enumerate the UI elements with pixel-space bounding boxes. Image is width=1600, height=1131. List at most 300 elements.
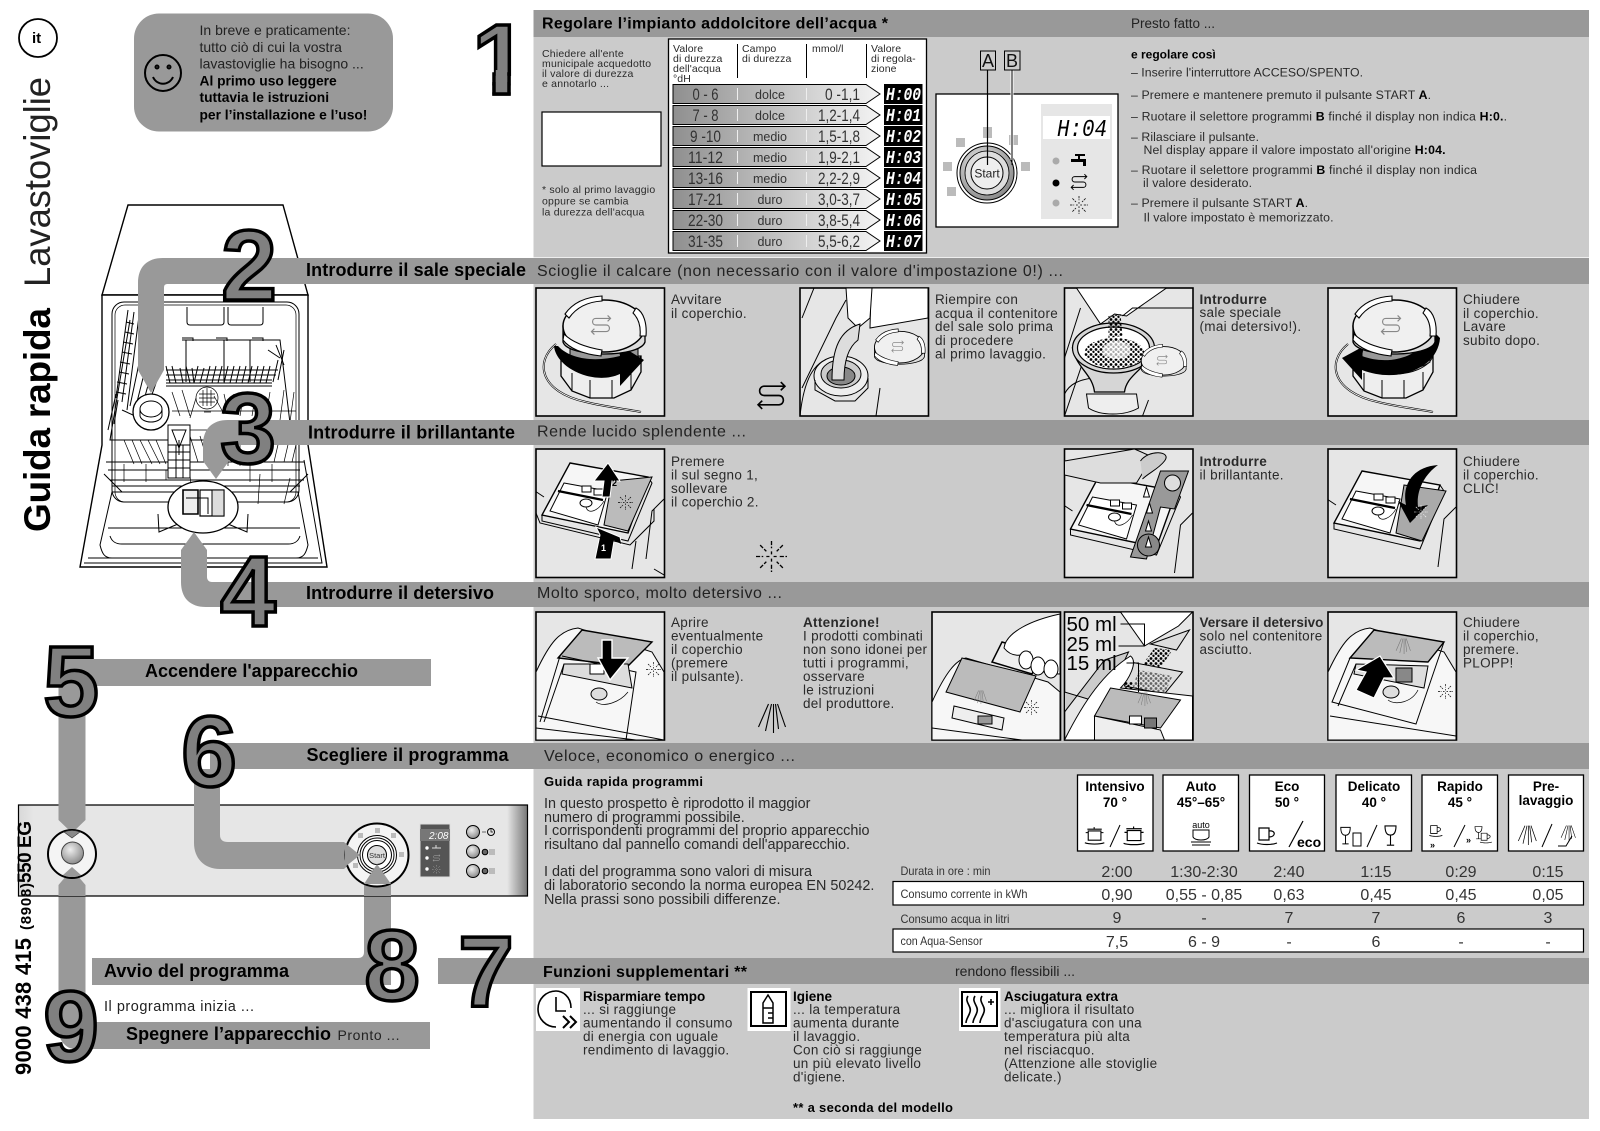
programme card: Eco: Eco (1275, 779, 1299, 794)
text: close and press: premere. (1463, 642, 1519, 657)
text: setting instructions: – Premere il pulsante START A. (1131, 196, 1308, 210)
row: H:04: medio (753, 172, 787, 186)
illustration: open dishwasher (80, 205, 327, 567)
callout: first use bubble: per l’installazione e l’uso! (200, 108, 367, 122)
function: extra drying: nel risciacquo. (1004, 1042, 1095, 1058)
row: energy (893, 882, 1584, 905)
programme card: Rapido: » (1430, 840, 1435, 850)
language badge: it: it (32, 30, 41, 47)
image: open rinse aid lid: 1 (601, 543, 606, 553)
band 9 and connector arrow (58, 869, 430, 1049)
row: aqua-sensor (893, 929, 1584, 952)
header band 2 with connector arrow (138, 258, 1589, 393)
title: Guida rapida Lavastoviglie: Guida rapida (17, 308, 58, 532)
callout: first use bubble: In breve e praticamente: (200, 22, 350, 38)
numeral 4: 4 (220, 536, 276, 648)
text: ask the water board (542, 48, 651, 90)
programme card: Rapido: Rapido (1437, 779, 1483, 794)
band 7 header (438, 958, 1589, 984)
row: water: 7 (1372, 910, 1381, 927)
title: Guida rapida Lavastoviglie (17, 77, 58, 532)
programme card: Pre-lavaggio: lavaggio (1519, 793, 1573, 808)
text: close cap: Lavare (1463, 319, 1506, 334)
row: H:00: dolce (755, 88, 785, 102)
text: pour detergent (1200, 615, 1323, 657)
text: close lid click (1463, 454, 1539, 496)
text: setting instructions: – Inserire l'interruttore ACCESO/SPENTO. (1131, 66, 1363, 80)
note box: blank (542, 112, 661, 166)
text: add rinse aid: Introdurre (1200, 454, 1267, 469)
numeral 5: 5 (43, 626, 99, 738)
text: setting instructions: Nel display appare il valore impostato all'origine H:04. (1144, 143, 1446, 157)
programme card: Auto: auto (1192, 820, 1210, 830)
numeral 9: 9 (43, 971, 99, 1083)
row: H:02: 1,5-1,8 (818, 127, 860, 146)
row: H:00: 0 -1,1 (825, 85, 860, 104)
heading: step 6 (306, 745, 795, 765)
row: H:01: 7 - 8 (692, 106, 718, 125)
image: close cap (1328, 288, 1456, 416)
text: warning about combined products: I prodotti combinati (803, 628, 923, 644)
diagram: control panel with knob and display: Start (974, 166, 1000, 180)
text: open lid: il pulsante). (671, 669, 744, 684)
function: extra drying: delicate.) (1004, 1070, 1062, 1084)
text: setting instructions (1131, 48, 1507, 224)
text: programme starts: Il programma inizia ... (104, 999, 254, 1015)
heading: step 2: Introdurre il sale speciale (306, 260, 526, 280)
image: detergent dosing levels: 15 ml (1066, 652, 1117, 675)
function: save time (536, 988, 733, 1058)
icon: salt refill symbol (758, 382, 785, 409)
programme card: Pre-lavaggio: Pre- (1533, 779, 1559, 794)
text: pour detergent: solo nel contenitore (1200, 628, 1323, 644)
text: setting instructions: il valore desiderato. (1143, 176, 1252, 190)
heading: step 8: Avvio del programma (104, 961, 290, 981)
heading: step 9: Spegnere l’apparecchio (126, 1024, 331, 1044)
heading: step 2: Scioglie il calcare (non necessario con il valore d'impostazione 0!) ... (537, 263, 1063, 280)
table: water hardness: zione (871, 63, 897, 75)
heading: step 3: Rende lucido splendente ... (537, 424, 746, 440)
row: H:05 (673, 189, 922, 211)
text: footnote (542, 184, 655, 218)
icon: rinse aid star (756, 541, 787, 572)
document number (11, 821, 36, 1075)
row: H:05: 17-21 (688, 190, 723, 209)
row: H:00 (673, 84, 922, 106)
row: duration: 2:00 (1101, 864, 1133, 881)
text: fill with water: al primo lavaggio. (935, 346, 1046, 362)
function: save time: di energia con uguale (583, 1029, 718, 1044)
text: programme guide intro: Nella prassi sono possibili differenze. (544, 892, 781, 908)
image: open rinse aid lid (532, 449, 664, 578)
row: H:03: 1,9-2,1 (818, 148, 860, 167)
numeral 2: 2 (221, 210, 277, 322)
row: H:03: H:03 (886, 149, 921, 169)
text: open lid: il sul segno 1, (671, 468, 758, 482)
function: hygiene: il lavaggio. (793, 1029, 860, 1044)
band 6 header and connector (194, 743, 1589, 869)
row: H:04: 2,2-2,9 (818, 169, 860, 188)
row: H:03: 11-12 (688, 148, 723, 167)
row: energy: 0,55 - 0,85 (1166, 887, 1242, 904)
text: programme guide intro: risultano dal pannello comandi dell'apparecchio. (544, 837, 850, 853)
text: fill with water: Riempire con (935, 292, 1018, 307)
row: H:00: 0 - 6 (692, 85, 718, 104)
display: 2:08 (428, 831, 449, 842)
function: extra drying: (Attenzione alle stoviglie (1004, 1056, 1157, 1071)
row: H:05: 3,0-3,7 (818, 190, 860, 209)
row: duration: 0:15 (1532, 864, 1564, 881)
row: H:02: 9 -10 (690, 127, 721, 146)
text: warning about combined products: le istruzioni (803, 682, 874, 698)
row: water: - (1201, 910, 1207, 927)
text: screw on: il coperchio. (671, 306, 747, 321)
row: H:07: 31-35 (688, 232, 723, 251)
programme card: Eco: eco (1297, 834, 1321, 850)
band 8 with connector arrow (92, 864, 391, 985)
table: water hardness: Valore (871, 43, 901, 55)
text: programme guide intro: I corrispondenti programmi del proprio apparecchio (544, 823, 870, 839)
heading: additional functions (543, 963, 1075, 981)
programme card: Rapido: » (1466, 835, 1471, 845)
programme card: Rapido (1422, 775, 1498, 851)
heading: step 3 (308, 422, 746, 442)
image: pour salt (1064, 288, 1193, 416)
row: H:06: 3,8-5,4 (818, 211, 860, 230)
row: H:04: 13-16 (688, 169, 723, 188)
title: Guida rapida Lavastoviglie: Lavastoviglie (17, 77, 58, 287)
text: add rinse aid: il brillantante. (1200, 468, 1284, 482)
numeral 7: 7 (458, 916, 514, 1028)
text: open lid: sollevare (671, 481, 728, 496)
function: hygiene: Con ciò si raggiunge (793, 1042, 922, 1058)
icon: smiley (145, 55, 181, 91)
row: water: Consumo acqua in litri (900, 912, 1010, 926)
image: close detergent lid (1328, 612, 1456, 740)
text: programme guide intro: di laboratorio secondo la norma europea EN 50242. (544, 878, 874, 894)
document number: 9000 438 415 (11, 938, 36, 1075)
text: footnote: * solo al primo lavaggio (542, 184, 655, 196)
diagram: control panel with knob and display (936, 51, 1118, 227)
function: extra drying: ... migliora il risultato (1004, 1002, 1135, 1017)
language badge: it (19, 19, 57, 57)
programme card: Delicato: Delicato (1348, 779, 1400, 794)
row: duration: 0:29 (1445, 864, 1477, 881)
text: warning about combined products: del produttore. (803, 696, 895, 711)
function: hygiene (748, 988, 953, 1115)
document number: (8908) (18, 883, 35, 930)
numeral 1: 1 (472, 4, 528, 116)
text: screw on (671, 292, 747, 321)
text: footnote: oppure se cambia (542, 196, 629, 208)
row: water: 3 (1544, 910, 1553, 927)
heading: step 9: Pronto ... (338, 1027, 400, 1043)
image: close rinse aid lid (1324, 449, 1456, 578)
row: energy: 0,90 (1101, 887, 1133, 904)
function: save time: Risparmiare tempo (583, 989, 705, 1004)
programme card: Pre-lavaggio (1508, 775, 1584, 851)
text: programme guide intro (544, 774, 874, 908)
text: screw on: Avvitare (671, 292, 722, 307)
text: add special salt: (mai detersivo!). (1200, 319, 1301, 334)
row: water: 9 (1113, 910, 1122, 927)
text: programme guide intro: numero di programmi possibile. (544, 810, 745, 826)
appliance control panel (18, 804, 528, 896)
row: H:00: H:00 (886, 86, 921, 106)
image: detergent dosing levels: 50 ml (1066, 613, 1117, 636)
programme card: Rapido: 45 ° (1448, 795, 1472, 810)
callout: first use bubble: tutto ciò di cui la vostra (200, 39, 342, 55)
function: save time: ... si raggiunge (583, 1002, 676, 1017)
power knob (48, 830, 96, 878)
heading: step 6: Scegliere il programma (306, 745, 509, 765)
callout: first use bubble: lavastoviglie ha bisogno ... (200, 56, 364, 72)
section 1 headings: Regolare l’impianto addolcitore dell’acqua * (542, 16, 889, 32)
header band 3 with connector arrow (203, 420, 1589, 479)
heading: step 3: Introdurre il brillantante (308, 422, 515, 442)
text: close lid click: Chiudere (1463, 454, 1520, 469)
row: energy: 0,63 (1273, 887, 1305, 904)
image: detergent dosing levels: 25 ml (1066, 633, 1117, 656)
text: programme guide intro: Guida rapida programmi (544, 774, 703, 789)
table: water hardness (668, 39, 926, 253)
text: setting instructions: – Rilasciare il pulsante. (1131, 130, 1259, 144)
text: ask the water board: e annotarlo ... (542, 78, 609, 90)
text: close cap (1463, 292, 1540, 348)
text: open lid: il coperchio (671, 642, 743, 657)
display (420, 824, 450, 877)
text: setting instructions: – Premere e mantenere premuto il pulsante START A. (1131, 88, 1431, 102)
callout: first use bubble (134, 14, 393, 132)
programme card: Auto (1163, 775, 1238, 851)
diagram: control panel with knob and display: H:04 (1057, 117, 1107, 144)
function: hygiene: ** a seconda del modello (793, 1100, 953, 1115)
function: extra drying (959, 988, 1157, 1084)
programme card: Auto: Auto (1186, 779, 1216, 794)
heading: additional functions: Funzioni supplementari ** (543, 964, 748, 981)
row: H:02: H:02 (886, 128, 921, 148)
text: pour detergent: asciutto. (1200, 642, 1252, 657)
table: water hardness: dell'acqua (673, 63, 721, 75)
text: ask the water board: municipale acquedotto (542, 58, 651, 70)
text: warning about combined products: tutti i programmi, (803, 656, 909, 670)
callout: first use bubble: Al primo uso leggere (200, 74, 337, 88)
row: H:07: 5,5-6,2 (818, 232, 860, 251)
programme card: Auto: 45°–65° (1177, 795, 1225, 810)
row: aqua-sensor: - (1545, 934, 1551, 951)
text: ask the water board: Chiedere all'ente (542, 48, 624, 60)
row: H:06: 22-30 (688, 211, 723, 230)
text: add special salt: sale speciale (1200, 305, 1281, 320)
heading: step 5: Accendere l'apparecchio (145, 661, 358, 681)
text: add special salt (1200, 292, 1301, 334)
text: open lid: Premere (671, 454, 725, 469)
label: A: A (982, 51, 994, 71)
text: ask the water board: il valore di durezza (542, 68, 634, 80)
row: energy: 0,05 (1532, 887, 1564, 904)
function: save time: aumentando il consumo (583, 1016, 733, 1030)
text: setting instructions: Il valore impostato è memorizzato. (1144, 210, 1334, 224)
image: pour rinse aid (1060, 449, 1193, 578)
row: duration: 1:30-2:30 (1170, 864, 1238, 881)
function: hygiene: Igiene (793, 989, 833, 1004)
row: duration: 1:15 (1360, 864, 1392, 881)
programme card: Eco: 50 ° (1275, 795, 1299, 810)
text: programme guide intro: I dati del programma sono valori di misura (544, 864, 812, 880)
image: open detergent lid (536, 612, 664, 740)
row: aqua-sensor: con Aqua-Sensor (900, 934, 983, 948)
text: close cap: Chiudere (1463, 292, 1520, 307)
text: fill with water: acqua il contenitore (935, 306, 1058, 321)
row: duration: Durata in ore : min (900, 864, 990, 878)
row: H:01: 1,2-1,4 (818, 106, 860, 125)
table: programme data (893, 864, 1584, 952)
text: fill with water: del sale solo prima (935, 319, 1053, 334)
row: H:07: H:07 (886, 233, 921, 253)
text: open lid: il coperchio 2. (671, 494, 759, 510)
row: energy: 0,45 (1445, 887, 1477, 904)
programme card: Delicato: 40 ° (1362, 795, 1386, 810)
header band 4 with connector arrow (181, 532, 1589, 607)
programme card: Intensivo: Intensivo (1085, 779, 1145, 794)
row: duration (900, 864, 1564, 881)
row: H:02: medio (753, 130, 787, 144)
row: H:05: duro (757, 193, 783, 207)
text: close cap: subito dopo. (1463, 333, 1540, 348)
row: aqua-sensor: - (1286, 934, 1292, 951)
row: H:03 (673, 147, 922, 169)
document number: 550 EG (15, 821, 36, 883)
icon: tap (1071, 154, 1086, 166)
panel: main grey background (534, 10, 1589, 1119)
row: H:04: H:04 (886, 170, 921, 190)
image: tablet placed by hand (932, 612, 1060, 740)
numeral 8: 8 (364, 910, 420, 1022)
icon: rinse star (1070, 196, 1088, 214)
row: H:07: duro (757, 235, 783, 249)
header band 1 (534, 10, 1589, 37)
row: H:06: H:06 (886, 212, 921, 232)
text: footnote: la durezza dell'acqua (542, 206, 645, 218)
option buttons (466, 826, 495, 878)
row: duration: 2:40 (1273, 864, 1305, 881)
row: H:06 (673, 210, 922, 232)
image: open rinse aid lid: 2 (612, 478, 617, 488)
row: aqua-sensor: 7,5 (1106, 934, 1128, 951)
function: hygiene: ... la temperatura (793, 1002, 901, 1017)
icon: detergent spray (758, 704, 786, 733)
text: setting instructions: – Ruotare il selettore programmi B finché il display non indica H:0.. (1131, 110, 1507, 124)
row: H:02 (673, 126, 922, 148)
connector arrows over panel (58, 804, 391, 896)
text: close and press: il coperchio, (1463, 628, 1539, 644)
table: water hardness: di regola- (871, 53, 916, 65)
text: close lid click: CLIC! (1463, 481, 1499, 496)
function: extra drying: d'asciugatura con una (1004, 1016, 1142, 1030)
section 1 headings: Presto fatto ... (1131, 16, 1215, 31)
heading: additional functions: rendono flessibili ... (955, 963, 1075, 979)
table: water hardness: di durezza (742, 53, 792, 65)
row: water: 6 (1457, 910, 1466, 927)
row: H:01: dolce (755, 109, 785, 123)
callout: first use bubble: tuttavia le istruzioni (200, 90, 329, 105)
table: water hardness: °dH (673, 73, 691, 85)
row: aqua-sensor: 6 - 9 (1188, 934, 1220, 951)
text: warning about combined products: osservare (803, 669, 865, 684)
function: hygiene: un più elevato livello (793, 1056, 921, 1071)
function: extra drying: Asciugatura extra (1004, 989, 1119, 1004)
text: open lid (671, 454, 759, 510)
numeral 1 (477, 23, 512, 96)
row: energy: 0,45 (1360, 887, 1392, 904)
text: add rinse aid (1200, 454, 1284, 482)
function: hygiene: aumenta durante (793, 1016, 900, 1030)
start knob (345, 824, 408, 886)
heading: step 4: Introdurre il detersivo (306, 583, 494, 603)
row: H:01 (673, 105, 922, 127)
text: warning about combined products (803, 615, 927, 711)
programme card: Eco (1250, 775, 1324, 851)
start knob: Start (369, 851, 386, 860)
text: close cap: il coperchio. (1463, 306, 1539, 321)
text: warning about combined products: Attenzione! (803, 615, 880, 630)
programme card: Delicato (1336, 775, 1412, 851)
row: H:06: duro (757, 214, 783, 228)
text: fill with water: di procedere (935, 333, 1014, 348)
numeral 3: 3 (220, 373, 276, 485)
row: H:01: H:01 (886, 107, 921, 127)
numeral 6: 6 (181, 696, 237, 808)
programme card: Intensivo (1078, 775, 1153, 851)
upper basket (110, 320, 292, 440)
text: fill with water (935, 292, 1058, 362)
function: save time: rendimento di lavaggio. (583, 1042, 730, 1058)
row: H:07 (673, 231, 922, 253)
row: aqua-sensor: - (1458, 934, 1464, 951)
text: open lid (671, 615, 763, 684)
row: water (900, 910, 1553, 927)
text: open lid: eventualmente (671, 628, 763, 644)
image: detergent dosing levels (1064, 612, 1193, 740)
text: warning about combined products: non sono idonei per (803, 642, 927, 657)
image: screw on cap (536, 288, 664, 416)
text: add special salt: Introdurre (1200, 292, 1267, 307)
text: pour detergent: Versare il detersivo (1200, 615, 1323, 630)
text: close and press: PLOPP! (1463, 656, 1514, 670)
table: water hardness: Campo (742, 43, 776, 55)
table: water hardness: Valore (673, 43, 703, 55)
label: B: B (1006, 51, 1018, 71)
table: water hardness: mmol/l (812, 43, 844, 55)
section 1 headings (542, 16, 1215, 32)
row: water: 7 (1285, 910, 1294, 927)
image: fill with water (800, 288, 928, 416)
row: H:03: medio (753, 151, 787, 165)
function: extra drying: temperatura più alta (1004, 1029, 1130, 1044)
text: close and press: Chiudere (1463, 615, 1520, 630)
band 5 and connector arrow (58, 659, 431, 833)
row: H:04 (673, 168, 922, 190)
row: H:05: H:05 (886, 191, 921, 211)
table: water hardness: di durezza (673, 53, 723, 65)
icon: salt arrows (1071, 174, 1087, 190)
text: close and press (1463, 615, 1539, 670)
heading: step 4: Molto sporco, molto detersivo ... (537, 585, 782, 602)
text: programme guide intro: In questo prospetto è riprodotto il maggior (544, 796, 811, 812)
row: aqua-sensor: 6 (1372, 934, 1381, 951)
text: setting instructions: – Ruotare il selettore programmi B finché il display non indica (1131, 163, 1477, 177)
text: setting instructions: e regolare così (1131, 48, 1216, 62)
